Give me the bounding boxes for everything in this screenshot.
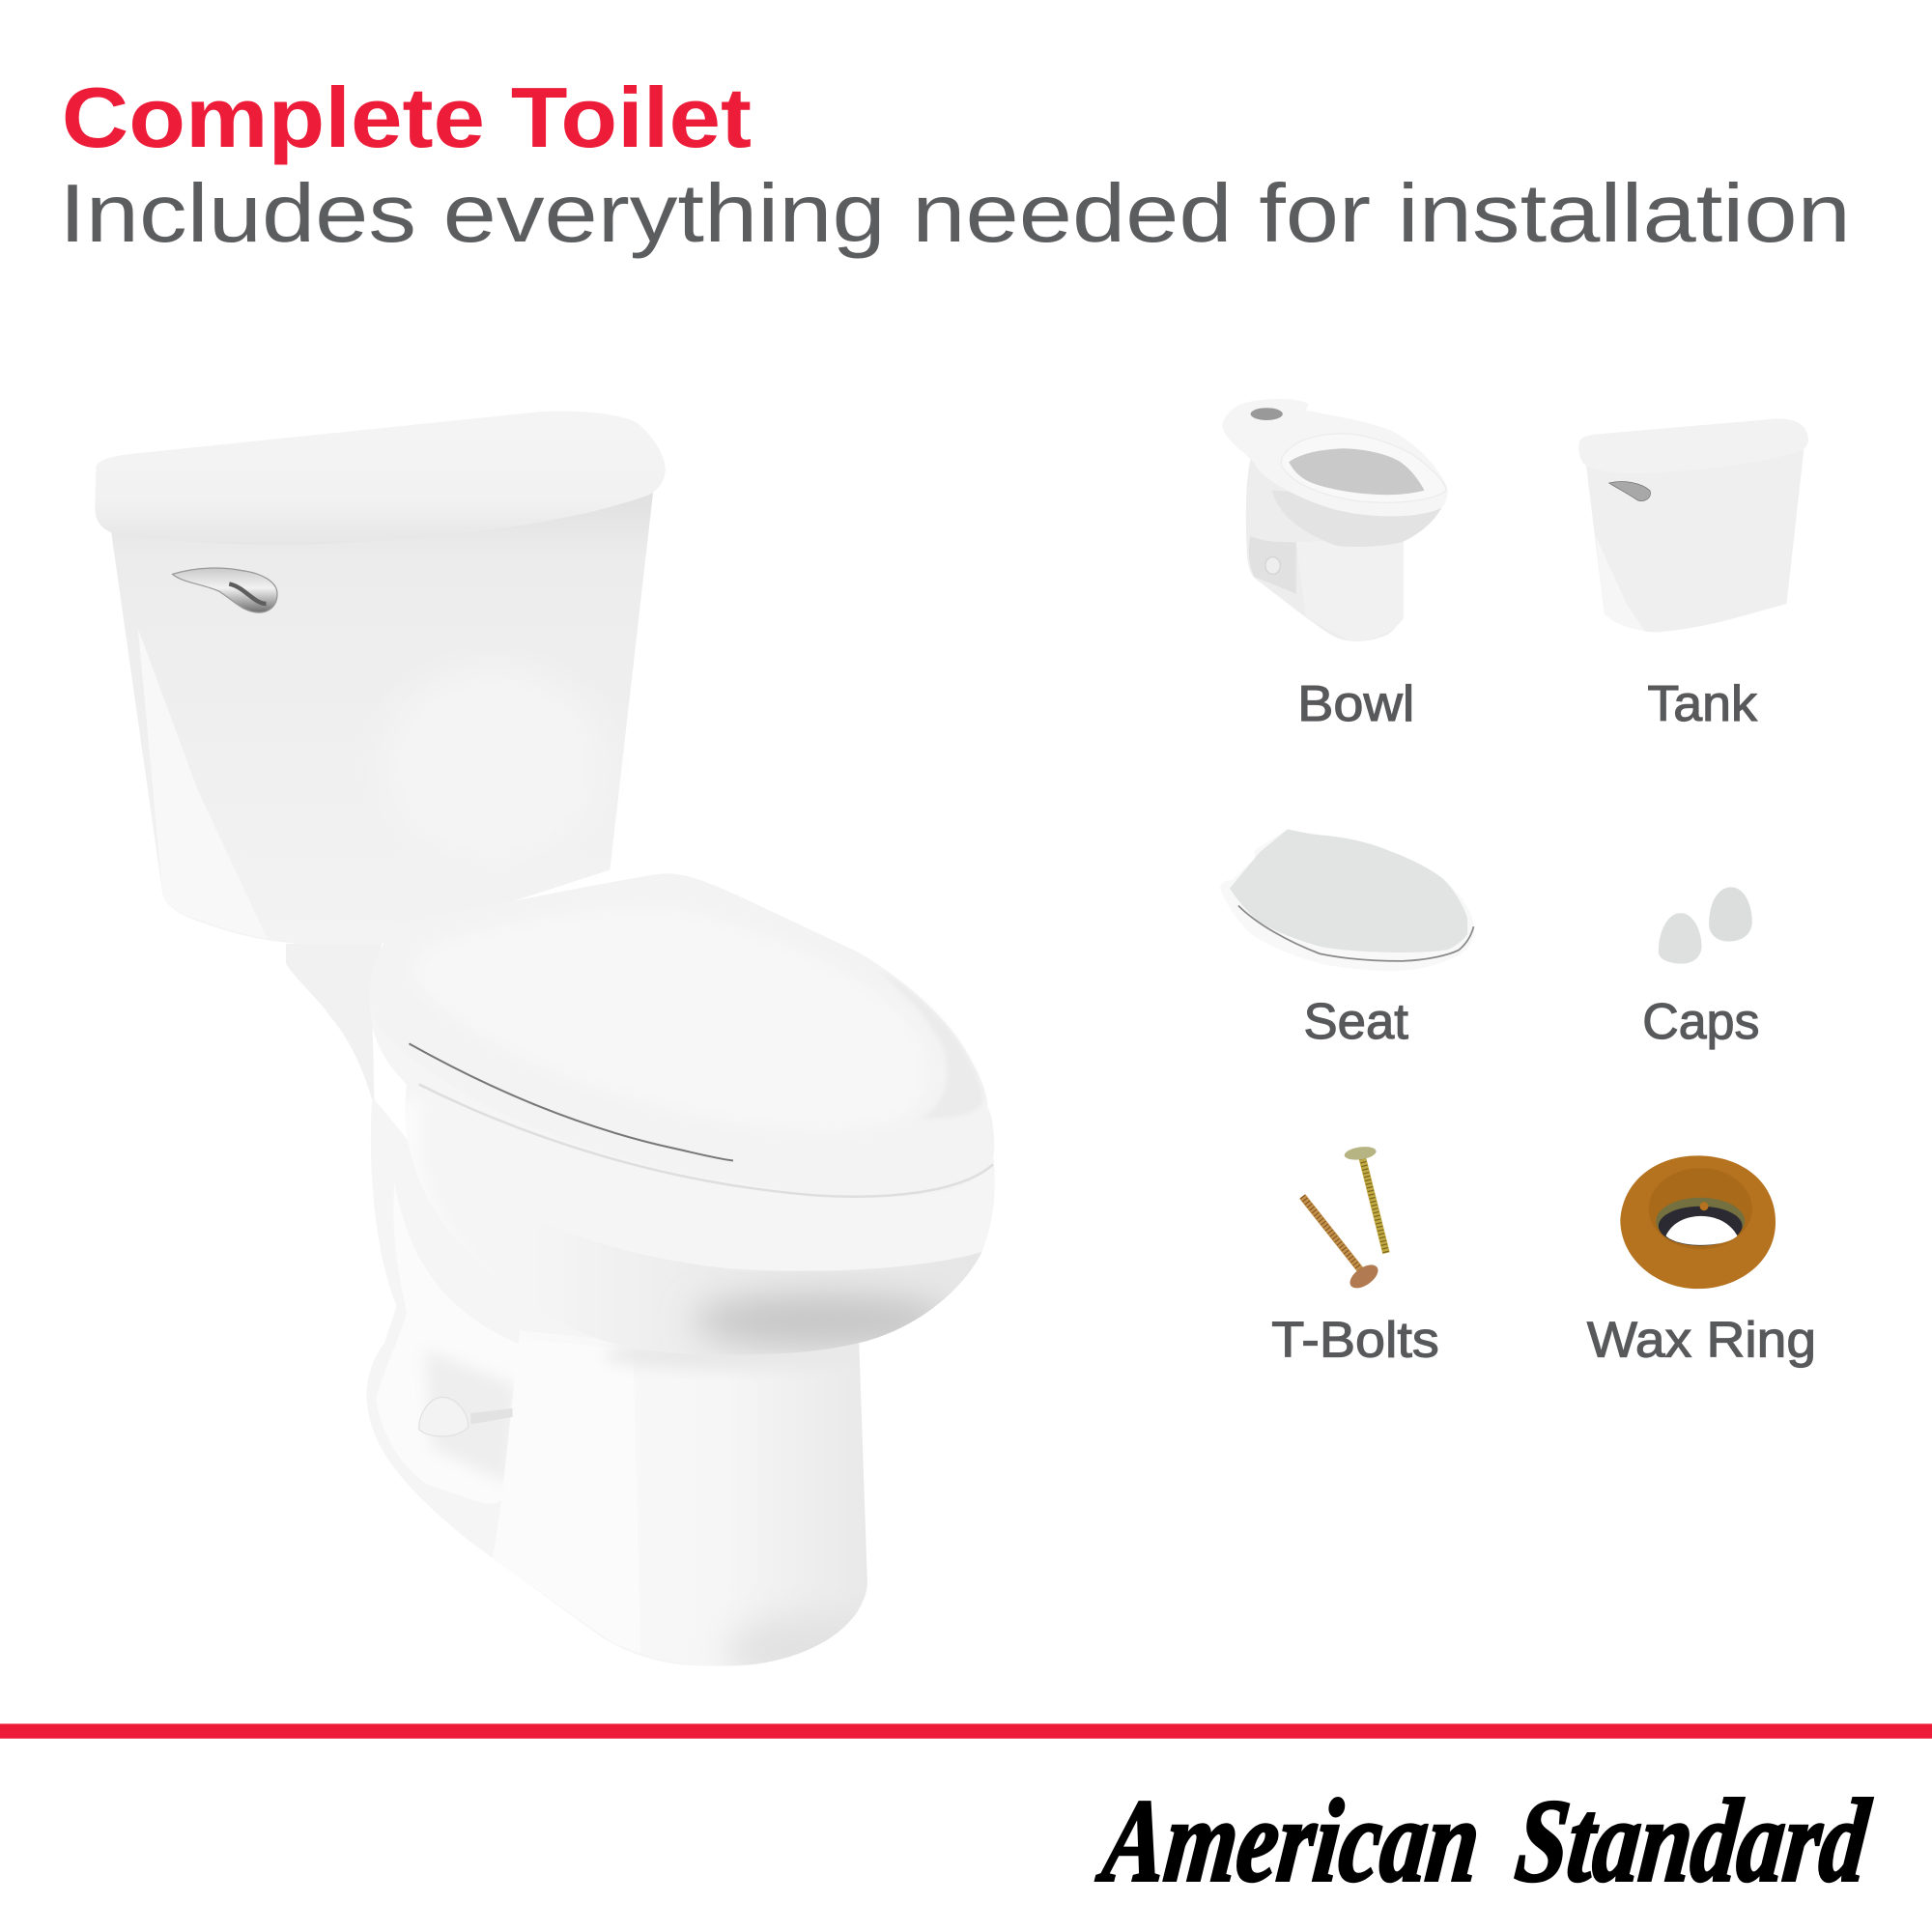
title: Complete Toilet — [62, 70, 752, 165]
seat ring — [370, 961, 994, 1197]
wax ring label: Wax Ring — [1587, 1312, 1816, 1368]
red divider bar — [0, 1723, 1932, 1739]
seat part picture — [1220, 829, 1474, 971]
brand logo: American — [1093, 1776, 1486, 1906]
tank handle — [1609, 481, 1650, 501]
tank part picture — [1578, 419, 1808, 632]
subtitle: Includes everything needed for installation — [59, 168, 1851, 260]
floor bolt cap — [419, 1397, 513, 1436]
pedestal — [504, 1343, 867, 1665]
seat lid — [369, 873, 987, 1161]
bolts picture — [1302, 1145, 1386, 1293]
seat label: Seat — [1303, 994, 1408, 1050]
flush handle — [173, 568, 277, 612]
t-bolts label: T-Bolts — [1271, 1312, 1439, 1368]
tank body — [111, 493, 653, 944]
item: seat — [1220, 829, 1474, 1050]
item: wax ring — [1587, 1155, 1816, 1368]
bowl part picture — [1222, 399, 1447, 641]
main toilet illustration — [95, 412, 998, 1688]
item: caps — [1642, 887, 1759, 1050]
wax ring picture — [1620, 1155, 1776, 1289]
caps part picture — [1659, 887, 1752, 964]
item: t-bolts — [1271, 1145, 1439, 1368]
bowl rim — [373, 1014, 995, 1354]
bowl label: Bowl — [1297, 676, 1414, 732]
brand logo — [1093, 1776, 1875, 1906]
bowl back and base — [366, 1096, 752, 1665]
caps label: Caps — [1642, 994, 1759, 1050]
item: tank — [1578, 419, 1808, 732]
tank neck — [286, 941, 382, 1109]
tank label: Tank — [1647, 676, 1758, 732]
tank lid — [95, 412, 666, 545]
item: bowl — [1222, 399, 1447, 732]
